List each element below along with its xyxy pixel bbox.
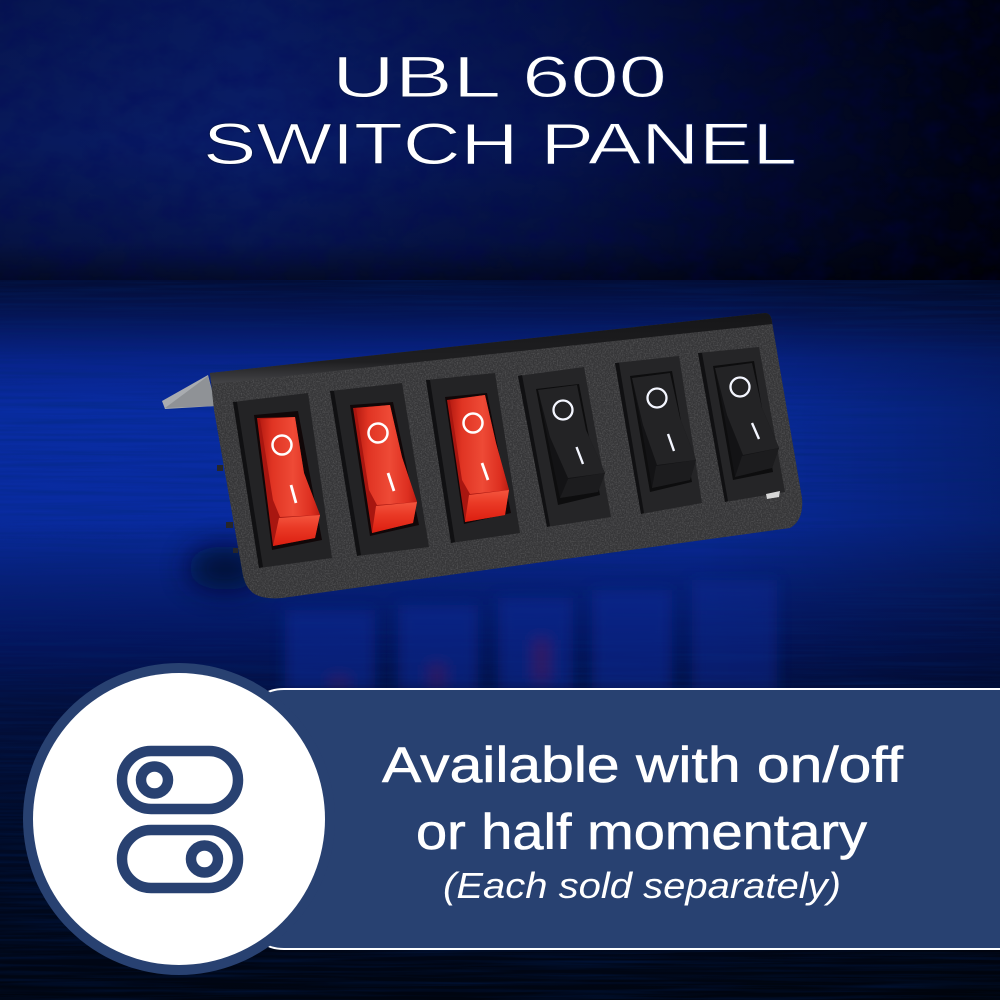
icon badge circle — [23, 663, 335, 975]
bracket wing — [162, 375, 216, 409]
banner text: or half momentary — [416, 804, 867, 860]
switch 6 black — [698, 347, 785, 502]
banner text: (Each sold separately) — [443, 865, 841, 906]
icon: two toggle switches — [122, 751, 238, 888]
callout banner — [262, 689, 1000, 949]
metal plate — [210, 313, 802, 598]
panel reflection on surface — [285, 580, 777, 690]
switch 3 red — [426, 373, 520, 543]
title: UBL 600 — [332, 45, 667, 110]
rear tabs — [217, 465, 238, 553]
switch 2 red — [330, 383, 429, 556]
banner text — [382, 737, 903, 906]
switch 5 black — [615, 356, 702, 514]
banner text: Available with on/off — [382, 737, 903, 793]
title — [203, 45, 797, 177]
switch 1 red — [233, 393, 332, 568]
title: SWITCH PANEL — [203, 112, 797, 177]
switch 4 black — [518, 367, 611, 527]
product: switch panel — [162, 300, 810, 610]
